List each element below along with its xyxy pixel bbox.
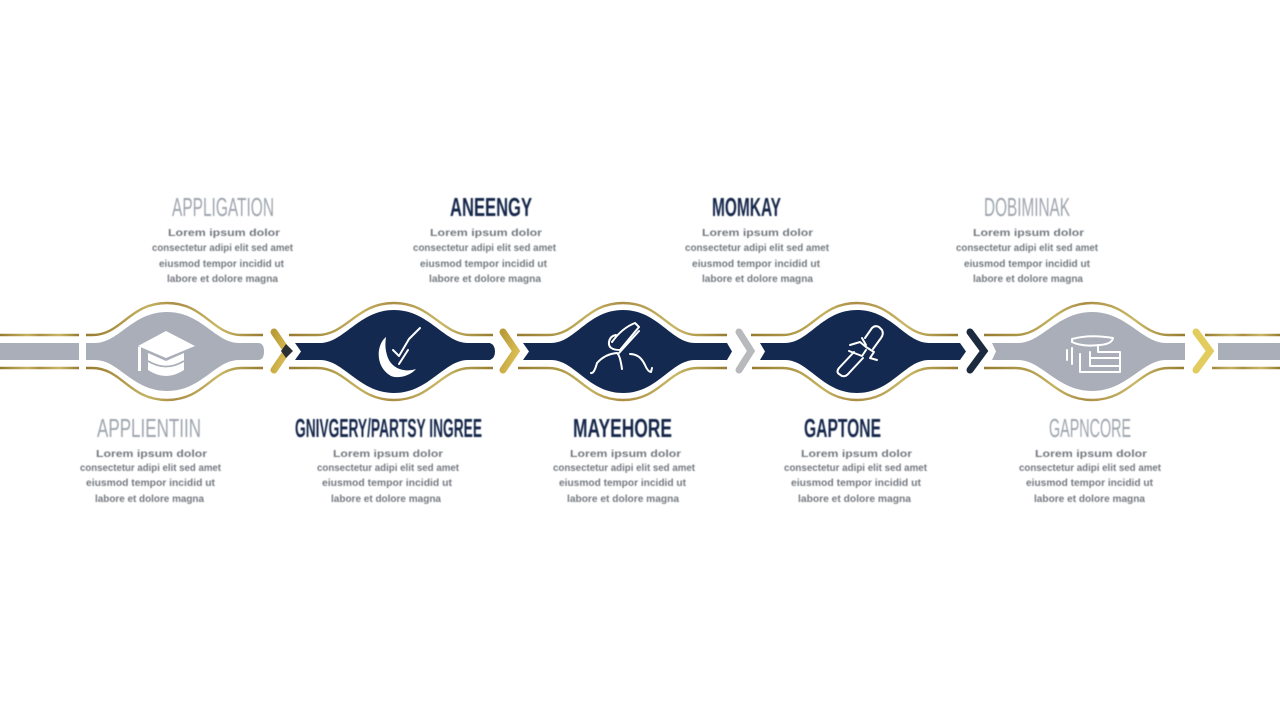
body text: consectetur adipi elit sed amet bbox=[317, 462, 459, 474]
chevron 1: gold bbox=[274, 332, 293, 370]
body text: consectetur adipi elit sed amet bbox=[956, 242, 1098, 254]
body text: Lorem ipsum dolor bbox=[801, 448, 912, 460]
left lead-in band bbox=[0, 335, 79, 368]
body text: consectetur adipi elit sed amet bbox=[553, 462, 695, 474]
body text: eiusmod tempor incidid ut bbox=[159, 258, 284, 270]
body text: labore et dolore magna bbox=[567, 493, 679, 505]
body text: Lorem ipsum dolor bbox=[430, 227, 542, 239]
body text: eiusmod tempor incidid ut bbox=[1026, 477, 1153, 489]
body text: Lorem ipsum dolor bbox=[973, 227, 1084, 239]
top column 1: application bbox=[152, 192, 293, 285]
icon: books and cap bbox=[1067, 336, 1120, 372]
body text: eiusmod tempor incidid ut bbox=[322, 477, 452, 489]
body text: eiusmod tempor incidid ut bbox=[964, 258, 1090, 270]
body text: eiusmod tempor incidid ut bbox=[86, 477, 215, 489]
right lead-out band bbox=[1205, 335, 1280, 368]
body text bbox=[413, 227, 556, 285]
body text bbox=[80, 448, 221, 505]
heading: MOMKAY bbox=[712, 192, 781, 222]
body text: Lorem ipsum dolor bbox=[702, 227, 813, 239]
body text bbox=[784, 448, 927, 505]
body text: labore et dolore magna bbox=[331, 493, 441, 505]
heading: GAPNCORE bbox=[1049, 413, 1131, 443]
icon: diploma scroll bbox=[838, 326, 883, 376]
body text bbox=[956, 227, 1098, 285]
heading: MAYEHORE bbox=[573, 413, 672, 443]
bottom column 5: capstone grey bbox=[1019, 413, 1161, 505]
body text: labore et dolore magna bbox=[973, 273, 1083, 285]
body text: labore et dolore magna bbox=[167, 273, 278, 285]
body text: consectetur adipi elit sed amet bbox=[784, 462, 927, 474]
body text: labore et dolore magna bbox=[702, 273, 813, 285]
body text: Lorem ipsum dolor bbox=[1035, 448, 1147, 460]
bottom column 2: degree bbox=[295, 413, 482, 505]
chevron 5: yellow bbox=[1196, 332, 1210, 370]
bottom column 3: mayehore bbox=[553, 413, 695, 505]
body text: eiusmod tempor incidid ut bbox=[692, 258, 820, 270]
heading: APPLIGATION bbox=[172, 192, 274, 222]
stage 1 band: application bbox=[86, 303, 264, 400]
body text: labore et dolore magna bbox=[95, 493, 204, 505]
heading: GAPTONE bbox=[804, 413, 881, 443]
heading: ANEENGY bbox=[450, 192, 532, 222]
body text: Lorem ipsum dolor bbox=[333, 448, 443, 460]
top column 3: momkay bbox=[685, 192, 829, 285]
body text bbox=[317, 448, 459, 505]
stage 5 band: grey bbox=[984, 303, 1185, 400]
body text: consectetur adipi elit sed amet bbox=[685, 242, 829, 254]
body text bbox=[553, 448, 695, 505]
chevron 4: dark navy bbox=[970, 332, 984, 370]
body text: labore et dolore magna bbox=[429, 273, 541, 285]
body text: consectetur adipi elit sed amet bbox=[152, 242, 293, 254]
top column 2: aneengy bbox=[413, 192, 556, 285]
body text: consectetur adipi elit sed amet bbox=[1019, 462, 1161, 474]
heading: GNIVGERY/PARTSY INGREE bbox=[295, 413, 482, 443]
body text bbox=[685, 227, 829, 285]
body text: labore et dolore magna bbox=[1034, 493, 1145, 505]
body text: consectetur adipi elit sed amet bbox=[80, 462, 221, 474]
bottom column 1: application bbox=[80, 413, 221, 505]
stage 4 band: navy bbox=[751, 303, 966, 400]
chevron 2: gold bbox=[503, 332, 516, 370]
body text: eiusmod tempor incidid ut bbox=[420, 258, 547, 270]
body text bbox=[152, 227, 293, 285]
heading: APPLIENTIIN bbox=[97, 413, 201, 443]
icon: figure with cap bbox=[591, 323, 652, 373]
body text: labore et dolore magna bbox=[798, 493, 911, 505]
heading: DOBIMINAK bbox=[984, 192, 1070, 222]
bottom column 4: capstone bbox=[784, 413, 927, 505]
icon: crescent and check bbox=[379, 328, 420, 377]
top column 4: dobiman bbox=[956, 192, 1098, 285]
body text: Lorem ipsum dolor bbox=[168, 227, 280, 239]
body text: Lorem ipsum dolor bbox=[96, 448, 207, 460]
stage 3 band: navy bbox=[517, 303, 732, 400]
chevron 3: grey bbox=[739, 332, 751, 370]
body text: Lorem ipsum dolor bbox=[570, 448, 681, 460]
body text: eiusmod tempor incidid ut bbox=[791, 477, 921, 489]
body text bbox=[1019, 448, 1161, 505]
body text: consectetur adipi elit sed amet bbox=[413, 242, 556, 254]
stage 2 band: navy bbox=[289, 303, 495, 400]
icon: graduation cap bbox=[138, 331, 195, 376]
body text: eiusmod tempor incidid ut bbox=[559, 477, 686, 489]
